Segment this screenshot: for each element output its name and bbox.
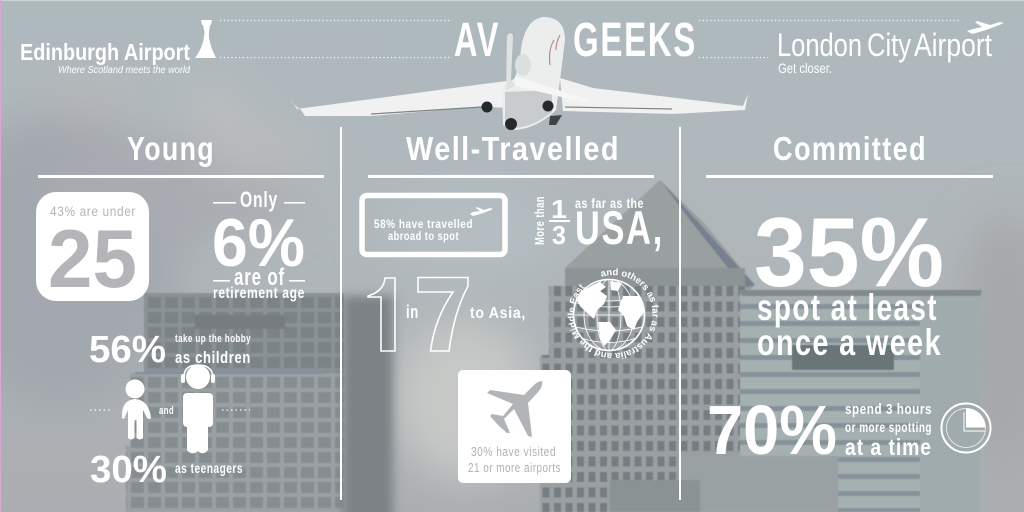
heading: Well-Travelled: Well-Travelled [406,130,620,167]
stat: 70% three hours: or more spotting [845,419,932,435]
stat: 56% as children: take up the hobby [175,333,251,345]
stat: only 6%: retirement age [213,285,305,302]
panel: Well-Travelled [359,130,664,483]
icon: child figure [122,380,151,440]
dotted header lines [220,20,960,58]
stat: 56% as children: as children [175,348,251,367]
icon: globe with ring text: and others as far as Australia and the Middle East [568,268,659,360]
title: AV GEEKS: AV [454,14,500,67]
stat: more than one third USA: USA, [575,201,664,254]
stat: 70% three hours: at a time [845,434,932,460]
logo: Edinburgh Airport: Where Scotland meets the world [58,64,191,76]
stat: 30% as teenagers: 30% [90,449,167,491]
stat: 35% weekly: spot at least [757,287,938,328]
logo: London City Airport: London [777,27,862,63]
stat: 30% as teenagers [90,449,243,491]
icon: small plane [967,21,1004,34]
icon: teenager with headphones [181,365,215,453]
stat: 56% as children [89,329,251,371]
stat card: 43% under 25: 25 [48,212,137,305]
airplane photo [290,17,748,130]
logo: London City Airport: Airport [914,27,992,63]
stat card: 43% under 25: 43% are under [50,203,136,219]
stat: only 6%: 6% [212,205,305,281]
icon: clock [942,404,990,452]
logo: London City Airport: City [867,27,911,63]
stat: 70% three hours: spend 3 hours [845,401,932,418]
stat: only 6% [212,187,305,302]
stat: more than one third USA: as far as the [575,195,644,211]
icon: plane [470,207,493,216]
logo: Edinburgh Airport [20,20,216,76]
stat: 56% as children: 56% [89,329,166,371]
stat: more than one third USA: 3 [552,220,566,250]
stat card: 58% abroad [362,196,505,254]
stat: 35% weekly: 35% [754,197,944,307]
logo: London City Airport [777,21,1004,76]
stat: more than one third USA: More than [532,196,547,245]
logo: London City Airport: Get closer. [778,60,832,76]
stat: 70% three hours [707,391,932,469]
connector: and: and [159,405,174,417]
engines [482,100,554,130]
stat: more than one third USA [532,194,664,254]
stat: 35% weekly: once a week [757,322,942,363]
column dividers [340,127,681,500]
title: AV GEEKS [454,14,697,67]
stat card: 58% abroad: abroad to spot [388,229,459,243]
stat: 1 in 7 to Asia: in [406,302,419,322]
stat card: 58% abroad: 58% have travelled [374,217,473,231]
logo: Edinburgh Airport: Edinburgh Airport [20,39,190,65]
stat: 70% three hours: 70% [707,391,837,469]
stat: only 6%: Only [240,187,278,212]
stat card: 30% visited 21 airports: 30% have visited [471,445,556,459]
stat card: 30% visited 21 airports: 21 or more airports [468,461,561,475]
icon: control tower [195,20,216,58]
heading: Committed: Committed [773,130,927,167]
title: AV GEEKS: GEEKS [573,14,697,67]
stat: 30% as teenagers: as teenagers [175,460,243,476]
stat: only 6%: are of [234,264,285,291]
stat: 1 in 7 to Asia: to Asia, [470,305,526,322]
stat: more than one third USA: 1 [551,194,567,224]
stat: 1 in 7 to Asia [368,278,526,351]
stat card: 43% under 25 [36,192,149,305]
icon: airplane [487,381,542,437]
stat card: 30% visited 21 airports [458,370,571,483]
stat: 35% weekly [754,197,944,363]
panel: Young [36,130,324,491]
heading: Young: Young [127,130,215,167]
panel: Committed [706,130,993,469]
